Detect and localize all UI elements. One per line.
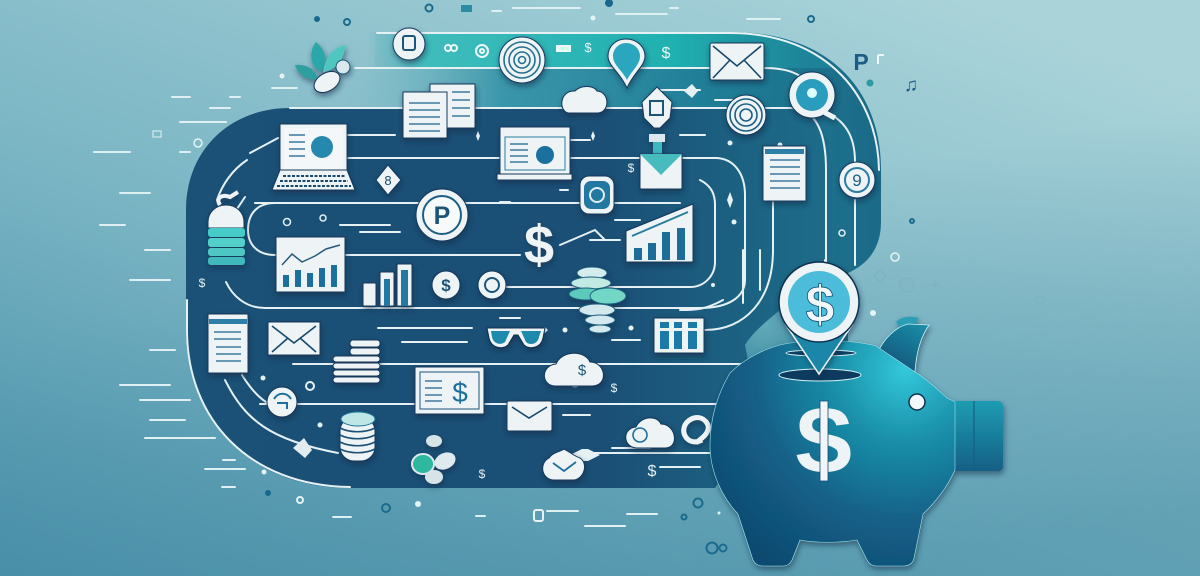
icon: line and bar chart card <box>276 237 345 292</box>
icon: fingerprint badge <box>499 37 545 83</box>
icon: document right <box>763 146 806 201</box>
icon: open envelope <box>640 154 682 189</box>
small track marks: $ <box>662 45 671 62</box>
small track marks: $ <box>584 40 592 55</box>
icon: envelope top <box>710 43 764 80</box>
icon: ring coin <box>478 271 506 299</box>
pig body <box>710 341 955 566</box>
icon: arrow marker <box>684 84 698 98</box>
icon: leaves and nut <box>295 42 350 97</box>
letter P and music note: ♫ <box>904 75 918 96</box>
icon: P coin <box>416 189 468 241</box>
icon: cloud upper <box>562 86 607 113</box>
track: teal top strip <box>365 32 832 68</box>
pig snout <box>950 401 1003 471</box>
small track marks: $ <box>479 467 486 481</box>
icon: magnifier <box>789 72 835 118</box>
small track marks: $ <box>628 161 635 175</box>
icon: shield <box>580 176 614 214</box>
location pin with dollar: $ <box>806 276 835 334</box>
icon: envelope left <box>268 322 320 355</box>
icon: nine coin <box>839 162 875 198</box>
pig ear <box>877 324 929 372</box>
icon: coin stack stripes <box>333 340 380 383</box>
icon: nut cluster <box>412 435 458 484</box>
icon: link and ring marks <box>445 45 570 57</box>
icon: dollar coin: $ <box>441 276 451 295</box>
icon: bulb pin <box>608 39 645 88</box>
icon: diamond eight: 8 <box>384 173 392 188</box>
icon: database stack with clasp <box>208 192 245 265</box>
icon: cloud bottom <box>543 449 585 480</box>
icon: diamond eight <box>376 165 401 195</box>
arrow: lower left marker <box>293 438 312 458</box>
icon: dollar card <box>415 367 484 414</box>
icon: bar columns <box>363 264 412 306</box>
icon: teal coin pile <box>569 267 626 333</box>
icon: ribbed coin stack <box>340 412 375 461</box>
small track marks <box>199 40 845 481</box>
icon: table <box>654 318 704 353</box>
pig ear back highlight <box>896 317 919 335</box>
icon: at symbol ring <box>684 418 708 443</box>
snout divider <box>973 401 975 471</box>
icon: dollar card: $ <box>452 377 468 408</box>
icon: dollar cloud <box>544 353 603 386</box>
letter P and music note <box>853 49 918 96</box>
track: teal upper band <box>340 32 881 400</box>
icon: nine coin: 9 <box>852 171 862 190</box>
icon: small circle badge <box>267 387 297 417</box>
belly dollar sign: S <box>794 391 854 491</box>
icon: document left <box>208 314 248 373</box>
track: dark main body <box>186 108 832 488</box>
icon: top coin <box>393 28 425 60</box>
icon: documents pair <box>403 84 475 138</box>
pig eye <box>909 394 925 410</box>
icon: laptop center <box>497 127 572 180</box>
icon: hex pin with funnel <box>642 87 672 154</box>
icon: large dollar: $ <box>524 215 554 275</box>
icon: laptop left <box>272 124 355 190</box>
letter P and music note: P <box>853 49 869 75</box>
location pin with dollar <box>779 262 859 374</box>
small track marks: $ <box>199 276 206 290</box>
track lines <box>187 33 879 487</box>
icon: dollar coin <box>432 271 460 299</box>
icon: dollar cloud: $ <box>578 362 587 379</box>
coin slots <box>779 350 861 381</box>
icon: spiral <box>726 95 766 135</box>
small track marks: $ <box>611 381 618 395</box>
icon: cloud bottom right <box>626 418 674 448</box>
icon: envelope bottom <box>507 401 552 431</box>
halo behind pig <box>675 235 855 415</box>
background dashes and dots <box>94 0 914 554</box>
small track marks: $ <box>648 463 657 480</box>
icon: wedge growth chart <box>626 204 693 262</box>
icon: P coin: P <box>434 202 450 230</box>
ghost marks on right <box>875 271 1044 304</box>
icon: sunglasses <box>487 328 545 348</box>
piggy bank <box>710 317 1003 566</box>
